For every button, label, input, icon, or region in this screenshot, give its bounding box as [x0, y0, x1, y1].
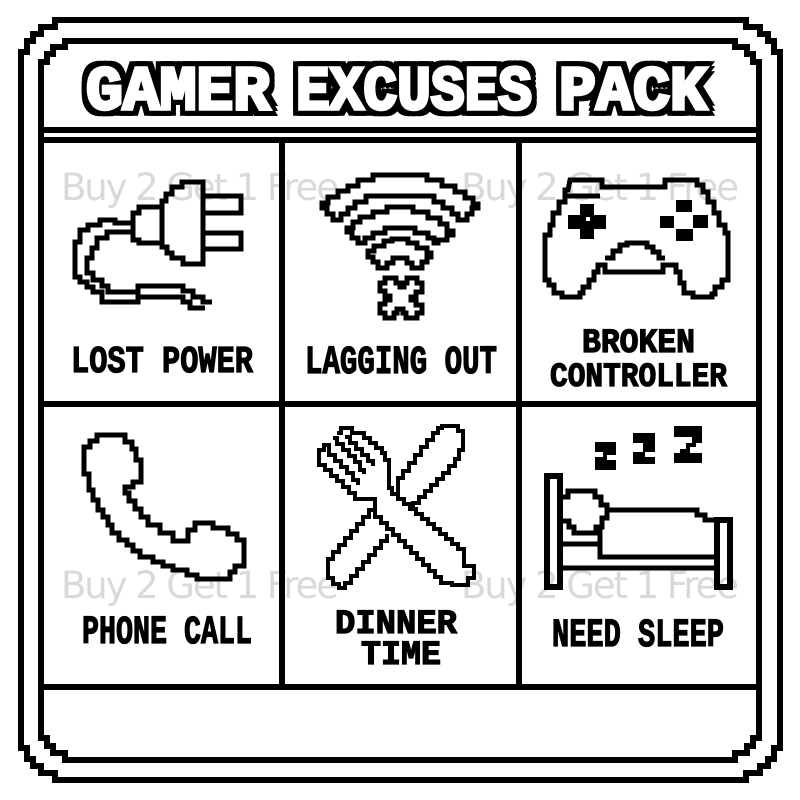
label: LOST POWER: [71, 341, 253, 384]
icon: game controller: [545, 180, 728, 297]
panel: lagging out: [305, 175, 497, 386]
label: DINNER: [335, 606, 458, 644]
icon: bed with sleeper: [547, 476, 730, 587]
title: GAMER: [86, 57, 271, 128]
panel: lost power: [71, 182, 253, 384]
watermarks: Buy 2 Get 1 Free: [461, 166, 739, 209]
watermarks: Buy 2 Get 1 Free: [61, 564, 339, 607]
icon: wifi with x: [322, 175, 478, 318]
panel: phone call: [82, 435, 252, 656]
label: [550, 325, 728, 397]
watermarks: Buy 2 Get 1 Free: [461, 564, 739, 607]
watermarks: Buy 2 Get 1 Free: [61, 166, 339, 209]
title: EXCUSES: [296, 57, 532, 128]
grid lines: [41, 130, 759, 687]
panel: need sleep: [547, 426, 730, 659]
label: BROKEN: [582, 325, 695, 363]
watermarks: [61, 166, 739, 607]
icon: plug: [75, 182, 241, 308]
label: PHONE CALL: [82, 611, 252, 656]
icon: z z z: [595, 426, 702, 470]
label: CONTROLLER: [550, 359, 728, 397]
label: [335, 606, 458, 675]
label: TIME: [361, 637, 441, 675]
label: NEED SLEEP: [552, 614, 724, 659]
panel: broken controller: [545, 180, 728, 397]
title: [86, 57, 708, 128]
icon: phone handset: [84, 435, 244, 579]
panel: dinner time: [319, 426, 474, 675]
label: LAGGING OUT: [305, 341, 497, 386]
icon: crossed fork and knife: [319, 426, 474, 588]
title: PACK: [559, 57, 708, 128]
